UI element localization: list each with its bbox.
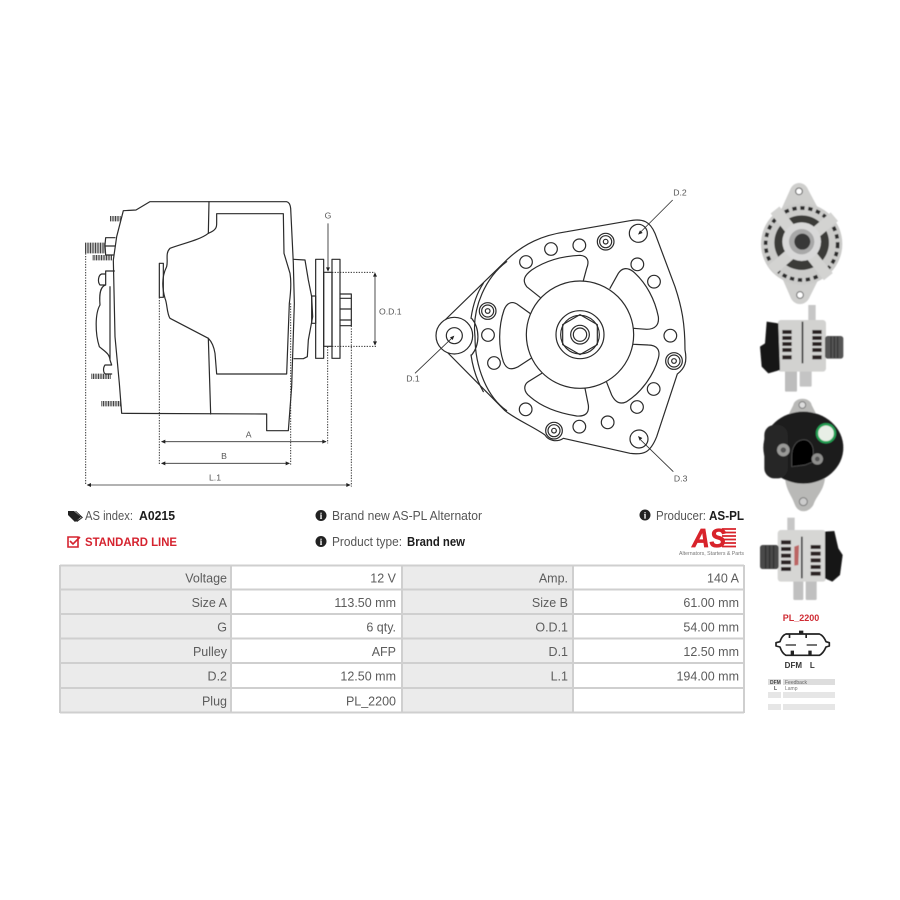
AS index row	[68, 509, 175, 523]
AS logo	[679, 523, 745, 557]
alternator body outline	[113, 202, 294, 431]
side view technical drawing with dimensions	[85, 202, 402, 487]
row: voltage and amperage: 12 V	[370, 572, 397, 586]
row: pulley and D.1: D.1	[549, 645, 568, 659]
row: G and O.D.1: 6 qty.	[366, 620, 396, 634]
row: voltage and amperage	[185, 572, 740, 586]
mounting hole labels: D.1	[406, 373, 420, 383]
central hub with hex nut	[526, 281, 634, 388]
plug code label: PL_2200	[783, 613, 819, 623]
rear cover detail and bolts	[85, 219, 121, 404]
product type: Product type:	[332, 535, 402, 549]
icon: checkbox	[68, 537, 80, 547]
photo: side of alternator	[760, 305, 843, 392]
row: D.2 and L.1: 12.50 mm	[340, 670, 396, 684]
dimension lines	[86, 223, 377, 487]
product type: Brand new	[407, 535, 465, 549]
row: size A and size B: 61.00 mm	[683, 596, 739, 610]
row: G and O.D.1: O.D.1	[535, 620, 568, 634]
connector pin legend: L	[774, 686, 777, 692]
AS index row: A0215	[139, 509, 175, 523]
row: G and O.D.1: G	[217, 620, 227, 634]
photo: front of alternator	[761, 183, 842, 304]
row: pulley and D.1	[193, 645, 739, 659]
dimension labels: O.D.1	[379, 307, 402, 317]
icon: info: i	[320, 511, 323, 521]
icon: info	[316, 510, 326, 521]
producer: Producer:	[656, 509, 706, 523]
row: pulley and D.1: 12.50 mm	[683, 645, 739, 659]
photo: rear of alternator	[763, 399, 843, 511]
icon: tags	[68, 511, 83, 522]
front view technical drawing	[406, 187, 688, 484]
dimension labels	[209, 210, 402, 483]
producer: AS-PL	[709, 509, 744, 523]
icon: info: i	[320, 537, 323, 547]
end frame outline	[445, 220, 686, 454]
icon: info	[316, 536, 326, 547]
row: voltage and amperage: 140 A	[707, 572, 740, 586]
AS logo: AS	[691, 523, 727, 553]
row: size A and size B: Size B	[532, 596, 568, 610]
mounting hole labels: D.3	[674, 474, 688, 484]
dimension labels: A	[246, 430, 252, 440]
mounting boss D.1	[436, 317, 473, 354]
row: voltage and amperage: Amp.	[539, 572, 568, 586]
mounting hole labels	[406, 187, 688, 484]
mounting hole labels: D.2	[673, 187, 687, 197]
row: plug: PL_2200	[346, 694, 396, 708]
standard line badge: STANDARD LINE	[85, 535, 177, 549]
dimension labels: B	[221, 451, 227, 461]
dimension labels: L.1	[209, 473, 221, 483]
leader arrows	[415, 200, 673, 472]
connector pin legend: DFM	[770, 680, 781, 686]
connector pin legend	[768, 679, 835, 710]
dimension labels: G	[325, 210, 332, 220]
photo: opposite side of alternator	[760, 518, 843, 600]
row: D.2 and L.1: D.2	[208, 670, 227, 684]
row: D.2 and L.1	[208, 670, 739, 684]
row: pulley and D.1: AFP	[372, 645, 396, 659]
row: G and O.D.1: 54.00 mm	[683, 620, 739, 634]
cooling windows	[500, 255, 659, 416]
product type	[316, 535, 465, 549]
row: voltage and amperage: Voltage	[185, 572, 227, 586]
row: size A and size B: 113.50 mm	[334, 596, 396, 610]
connector diagram: L	[810, 661, 815, 670]
AS index row: AS index:	[85, 509, 133, 523]
label cells	[60, 565, 573, 713]
producer	[640, 509, 744, 523]
row: plug: Plug	[202, 694, 227, 708]
inner frame arcs	[471, 262, 507, 411]
grid	[60, 565, 744, 713]
row: D.2 and L.1: L.1	[551, 670, 568, 684]
row: pulley and D.1: Pulley	[193, 645, 228, 659]
pulley and shaft	[293, 259, 351, 359]
specification table	[60, 565, 744, 713]
AS logo: Alternators, Starters & Parts	[679, 551, 745, 557]
row: D.2 and L.1: 194.00 mm	[676, 670, 739, 684]
connector diagram	[776, 631, 829, 670]
small holes	[482, 224, 677, 448]
connector pin legend: Lamp	[785, 686, 798, 692]
row: size A and size B	[192, 596, 739, 610]
row: size A and size B: Size A	[192, 596, 228, 610]
connector diagram: DFM	[785, 661, 802, 670]
connector pin legend: Feedback	[785, 680, 807, 686]
row: plug	[202, 694, 396, 708]
icon: info: i	[644, 510, 647, 520]
through bolts	[479, 233, 682, 439]
row: G and O.D.1	[217, 620, 739, 634]
brand description: Brand new AS-PL Alternator	[332, 509, 482, 523]
